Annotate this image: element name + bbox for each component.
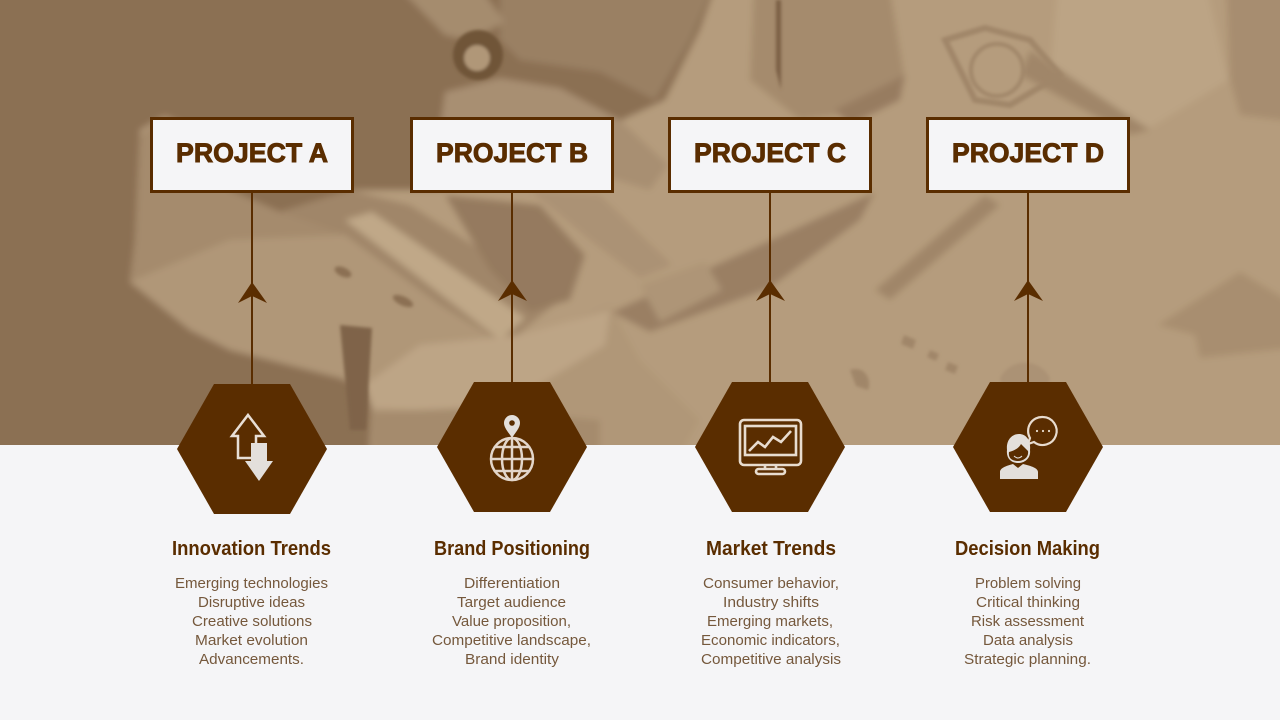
- text block: Innovation Trends list: Disruptive ideas: [198, 594, 305, 611]
- text block: Innovation Trends list: Emerging technologies: [175, 575, 328, 592]
- hexagon D: [953, 382, 1103, 512]
- hexagon A: [177, 384, 327, 514]
- column: Project C: [670, 118, 870, 668]
- text block: Brand Positioning list: Brand identity: [465, 651, 559, 668]
- text block: Decision Making list: [964, 575, 1091, 668]
- text block: Market Trends list: [701, 575, 841, 668]
- icon: globe with location pin: [491, 415, 533, 480]
- label box: Project B: PROJECT B: [436, 138, 588, 168]
- label box: Project B: [412, 118, 612, 192]
- text block: Innovation Trends list: Advancements.: [199, 651, 304, 668]
- text block: Decision Making list: Risk assessment: [971, 613, 1085, 630]
- text block: Brand Positioning list: Competitive landscape,: [432, 632, 591, 649]
- text block: Decision Making list: Strategic planning.: [964, 651, 1091, 668]
- text block: Decision Making list: Data analysis: [983, 632, 1073, 649]
- text block: Market Trends list: Economic indicators,: [701, 632, 840, 649]
- text block: Brand Positioning list: Value proposition,: [452, 613, 571, 630]
- icon: person with speech bubble: [1000, 417, 1057, 479]
- heading: Decision Making: Decision Making: [955, 538, 1100, 560]
- icon: up and down arrows: [232, 415, 273, 481]
- connector arrow A: [238, 192, 267, 385]
- label box: Project D: [928, 118, 1128, 192]
- heading: Brand Positioning: Brand Positioning: [434, 538, 590, 560]
- column: Project D: [928, 118, 1128, 668]
- label box: Project C: [670, 118, 870, 192]
- connector arrow B: [498, 192, 527, 383]
- icon: monitor with trend line: [740, 420, 801, 474]
- hexagon C: [695, 382, 845, 512]
- label box: Project A: PROJECT A: [176, 138, 328, 168]
- text block: Brand Positioning list: [432, 575, 591, 668]
- connector arrow C: [756, 192, 785, 383]
- text block: Brand Positioning list: Differentiation: [464, 575, 560, 592]
- label box: Project A: [152, 118, 352, 192]
- heading: Market Trends: Market Trends: [706, 538, 836, 560]
- label box: Project C: PROJECT C: [694, 138, 846, 168]
- column: Project B: [412, 118, 612, 668]
- text block: Innovation Trends list: [175, 575, 328, 668]
- text block: Decision Making list: Critical thinking: [976, 594, 1080, 611]
- text block: Decision Making list: Problem solving: [975, 575, 1081, 592]
- background photo: sepia desk scene: [0, 0, 1280, 445]
- heading: Innovation Trends: Innovation Trends: [172, 538, 331, 560]
- label box: Project D: PROJECT D: [952, 138, 1104, 168]
- white lower band: [0, 445, 1280, 720]
- column: Project A: [152, 118, 352, 668]
- text block: Market Trends list: Competitive analysis: [701, 651, 841, 668]
- connector arrow D: [1014, 192, 1043, 383]
- text block: Market Trends list: Consumer behavior,: [703, 575, 839, 592]
- text block: Brand Positioning list: Target audience: [457, 594, 566, 611]
- text block: Innovation Trends list: Creative solutions: [192, 613, 312, 630]
- text block: Market Trends list: Emerging markets,: [707, 613, 833, 630]
- text block: Innovation Trends list: Market evolution: [195, 632, 308, 649]
- hexagon B: [437, 382, 587, 512]
- text block: Market Trends list: Industry shifts: [723, 594, 819, 611]
